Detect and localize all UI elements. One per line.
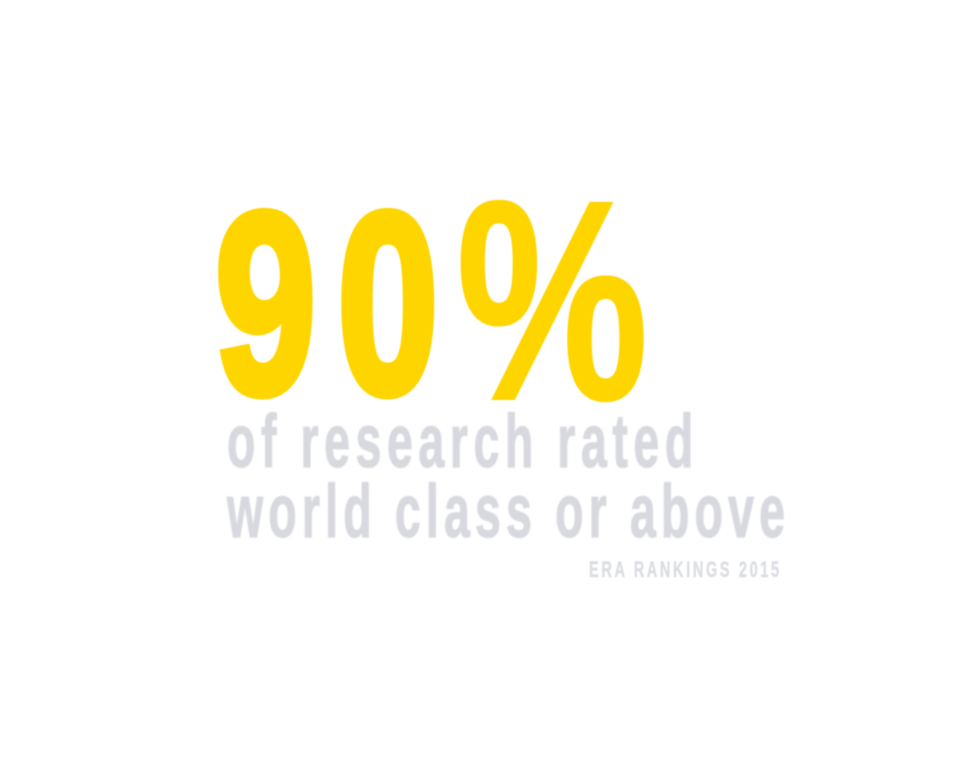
text block: description: world class or above bbox=[226, 471, 785, 554]
text block: description bbox=[226, 401, 785, 554]
headline number: 90: 90 bbox=[215, 160, 460, 448]
source note: ERA RANKINGS 2015 bbox=[589, 557, 779, 582]
text block: description: of research rated bbox=[227, 401, 693, 484]
percent sign: % bbox=[456, 141, 649, 460]
